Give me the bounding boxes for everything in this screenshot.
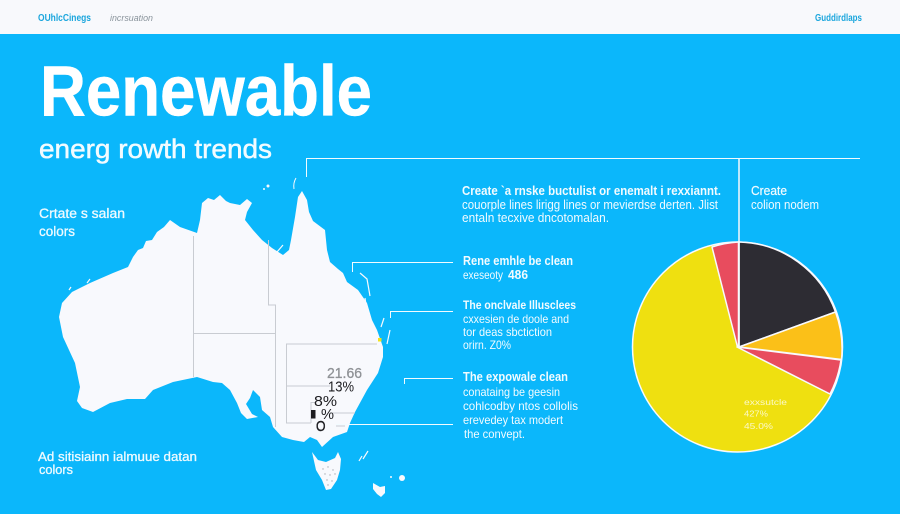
slice: red right	[737, 347, 841, 394]
text block: callout three: erevedey tax modert	[463, 413, 564, 427]
slice: black	[739, 242, 836, 347]
note: lower left: colors	[39, 462, 73, 477]
header bar	[0, 0, 900, 34]
text block: pie note	[751, 183, 819, 212]
subtitle: energ rowth trends	[39, 134, 272, 164]
title: Renewable	[40, 52, 372, 132]
northern islands	[263, 184, 405, 497]
text block: callout two: tor deas sbctiction	[463, 325, 552, 339]
text block: pie note: Create	[751, 183, 787, 198]
text block: callout two: The onclvale Illusclees	[463, 298, 576, 312]
note: upper left: colors	[39, 224, 75, 239]
text block: intro: entaln tecxive dncotomalan.	[462, 210, 609, 225]
map values: 8%	[314, 393, 337, 410]
text block: intro: couorple lines lirigg lines or mevierdse derten. Jlist	[462, 197, 718, 212]
text block: intro: Create `a rnske buctulist or enemalt i rexxiannt.	[462, 183, 721, 198]
note: lower left	[38, 449, 197, 477]
text block: callout one: 486	[508, 268, 528, 282]
Tasmania	[312, 452, 341, 490]
pie slice label: 45.0%	[744, 421, 774, 431]
pie leader line	[738, 158, 740, 347]
text block: callout three: conataing be geesin	[463, 385, 560, 399]
pie slice label: exxsutcle	[744, 397, 787, 407]
text block: callout two: orirn. Z0%	[463, 338, 511, 352]
text block: callout one: Rene emhle be clean	[463, 254, 573, 268]
text block: callout one: exeseoty	[463, 270, 503, 282]
map values: O	[316, 418, 326, 435]
note: upper left	[39, 206, 125, 239]
text block: callout three: the convept.	[464, 427, 525, 441]
pie slice label: 427%	[744, 408, 768, 418]
Tasmania dots	[322, 466, 336, 486]
text block: pie note: colion nodem	[751, 197, 819, 212]
state borders	[194, 236, 377, 427]
map values: 13%	[328, 378, 354, 396]
note: upper left: Crtate s salan	[39, 206, 125, 221]
header bar: incrsuation	[110, 13, 153, 24]
yellow site marker	[378, 338, 382, 342]
pie slice label	[744, 397, 787, 431]
header bar: OUhlcCinegs	[38, 12, 91, 24]
slice: amber	[739, 312, 842, 360]
text block: callout three: cohlcodby ntos collolis	[463, 399, 578, 413]
mainland	[59, 191, 383, 447]
slice: red top	[712, 242, 738, 347]
map values	[311, 365, 362, 435]
text block: callout two: cxxesien de doole and	[463, 312, 569, 326]
map values: 21.66	[327, 365, 362, 382]
text block: callout two	[463, 298, 576, 352]
text block: callout three	[463, 369, 578, 441]
note: lower left: Ad sitisiainn ialmuue datan	[38, 449, 197, 464]
callout leader lines	[306, 158, 860, 424]
pie chart	[632, 242, 842, 452]
coast islands	[69, 178, 390, 461]
map of Australia	[59, 178, 405, 497]
text block: callout one	[463, 254, 573, 282]
text block: intro	[462, 183, 721, 225]
header bar: Guddirdlaps	[815, 13, 862, 24]
text block: callout three: The expowale clean	[463, 369, 568, 384]
map values: %	[321, 406, 334, 423]
